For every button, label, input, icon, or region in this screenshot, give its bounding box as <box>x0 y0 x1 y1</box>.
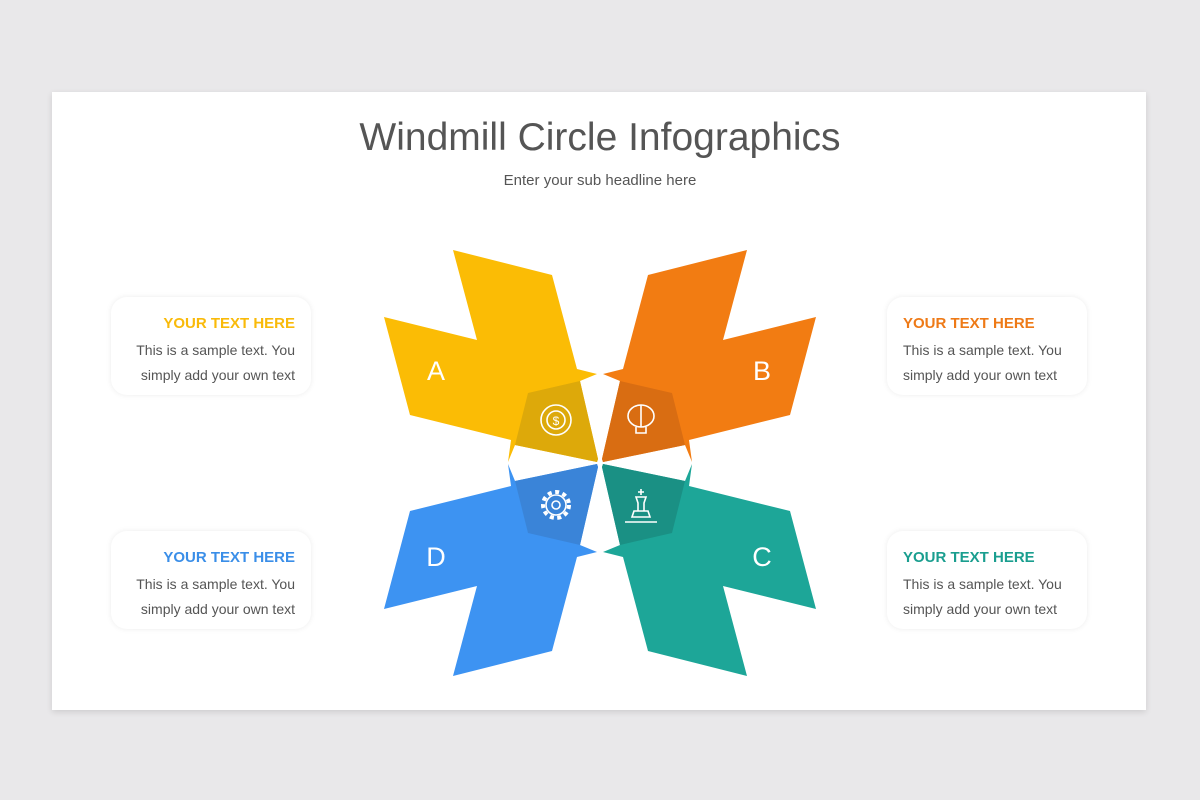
blade C <box>602 464 816 676</box>
text box D: This is a sample text. You simply add your own text <box>136 576 295 617</box>
text box A: This is a sample text. You simply add your own text <box>136 342 295 383</box>
text box B: This is a sample text. You simply add your own text <box>903 342 1062 383</box>
blade B <box>602 250 816 462</box>
text box C: YOUR TEXT HERE <box>903 549 1035 566</box>
card <box>52 92 1146 710</box>
windmill diagram: D <box>426 542 446 572</box>
windmill diagram: B <box>753 356 771 386</box>
icon: gear <box>543 492 569 518</box>
icon: brain bulb <box>628 405 654 433</box>
title: Windmill Circle Infographics <box>359 116 841 159</box>
icon: dollar chart: $ <box>553 414 560 428</box>
text box D: YOUR TEXT HERE <box>163 549 295 566</box>
text box B <box>887 297 1087 395</box>
text box B: YOUR TEXT HERE <box>903 315 1035 332</box>
subtitle: Enter your sub headline here <box>504 172 696 189</box>
text box D <box>111 531 311 629</box>
text box C: This is a sample text. You simply add your own text <box>903 576 1062 617</box>
text box A: YOUR TEXT HERE <box>163 315 295 332</box>
icon: dollar chart <box>541 405 571 435</box>
blade D <box>384 464 598 676</box>
text box A <box>111 297 311 395</box>
text box C <box>887 531 1087 629</box>
windmill diagram: C <box>752 542 772 572</box>
blade A: A <box>427 356 445 386</box>
blade A <box>384 250 598 462</box>
icon: chess king <box>625 489 657 522</box>
